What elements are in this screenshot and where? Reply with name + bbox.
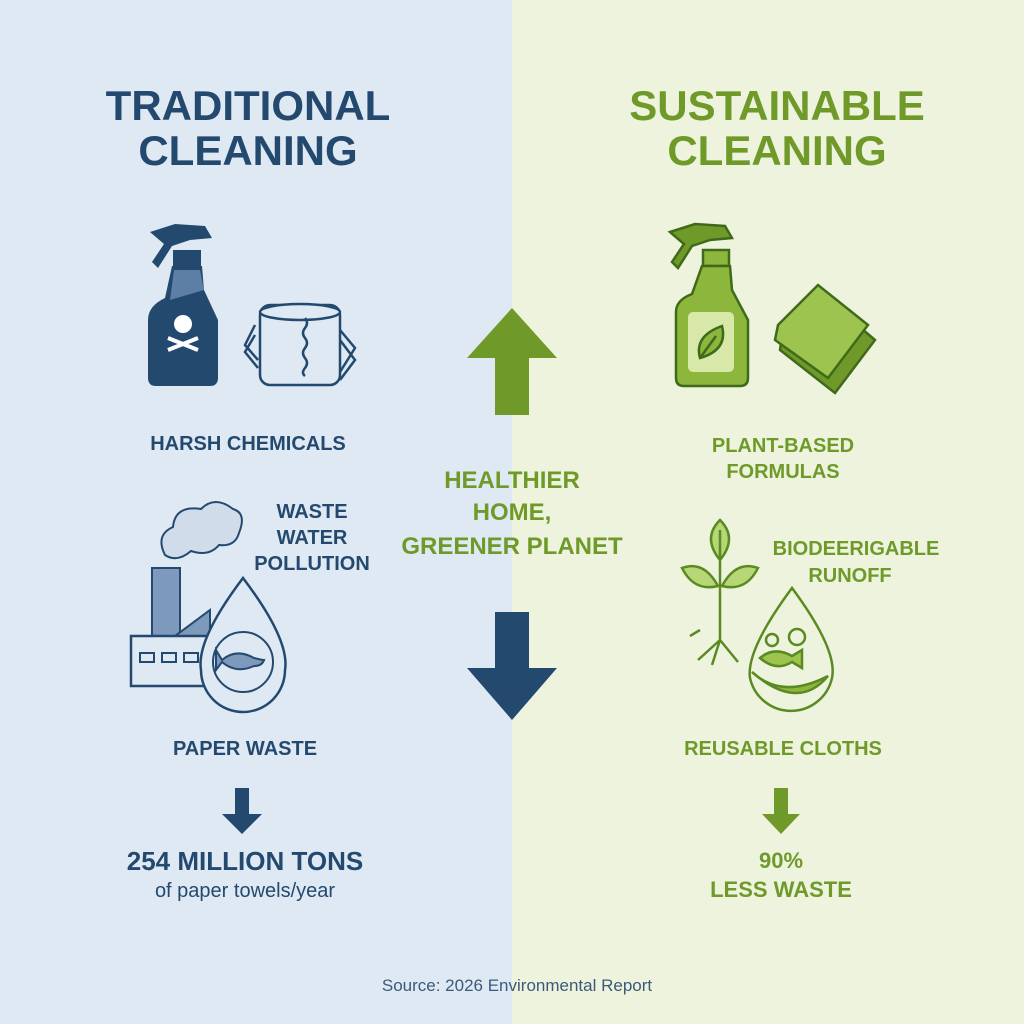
- panel: sustainable background: [512, 0, 1024, 1024]
- title: sustainable cleaning: SUSTAINABLE: [629, 82, 925, 129]
- arrow: small down navy: [222, 788, 262, 834]
- text: plant-based formulas: FORMULAS: [726, 461, 840, 483]
- text: center slogan: HOME,: [473, 499, 551, 526]
- icon: factory with cloud and polluted drop: [131, 502, 285, 712]
- text: plant-based formulas: PLANT-BASED: [712, 435, 854, 457]
- text: reusable cloths: REUSABLE CLOTHS: [684, 738, 882, 760]
- icon: plant and clean drop: [682, 520, 833, 711]
- title: traditional cleaning: [106, 82, 390, 174]
- stat: 254 million tons: of paper towels/year: [155, 880, 335, 902]
- text: waste water pollution: WATER: [277, 527, 348, 549]
- arrow: center down navy: [467, 612, 557, 720]
- panel: traditional background: [0, 0, 512, 1024]
- text: biodegradable runoff: [773, 538, 939, 587]
- title: sustainable cleaning: [629, 82, 925, 174]
- text: center slogan: GREENER PLANET: [401, 533, 623, 560]
- icon: toxic spray bottle: [148, 224, 218, 386]
- stat: 90% less waste: 90%: [759, 848, 803, 873]
- text: biodegradable runoff: BIODEERIGABLE: [773, 538, 939, 560]
- title: traditional cleaning: CLEANING: [138, 127, 358, 174]
- text: plant-based formulas: [712, 435, 854, 483]
- text: waste water pollution: WASTE: [276, 501, 348, 523]
- arrow: small down green: [762, 788, 800, 834]
- text: center slogan: HEALTHIER: [444, 467, 580, 494]
- stat: 254 million tons: [127, 846, 363, 902]
- stat: 90% less waste: [710, 848, 852, 902]
- text: waste water pollution: [254, 501, 370, 575]
- icon: green sponge cloths: [775, 285, 875, 393]
- text: paper waste: PAPER WASTE: [173, 738, 317, 760]
- stat: 254 million tons: 254 MILLION TONS: [127, 846, 363, 876]
- icon: plant spray bottle: [670, 224, 748, 386]
- text: biodegradable runoff: RUNOFF: [808, 565, 892, 587]
- text: source: Source: 2026 Environmental Report: [382, 976, 652, 995]
- title: sustainable cleaning: CLEANING: [667, 127, 887, 174]
- stat: 90% less waste: LESS WASTE: [710, 877, 852, 902]
- text: harsh chemicals: HARSH CHEMICALS: [150, 433, 346, 455]
- title: traditional cleaning: TRADITIONAL: [106, 82, 390, 129]
- text: center slogan: [401, 467, 623, 560]
- text: waste water pollution: POLLUTION: [254, 553, 370, 575]
- icon: paper towel roll: [245, 304, 355, 385]
- arrow: center up green: [467, 308, 557, 415]
